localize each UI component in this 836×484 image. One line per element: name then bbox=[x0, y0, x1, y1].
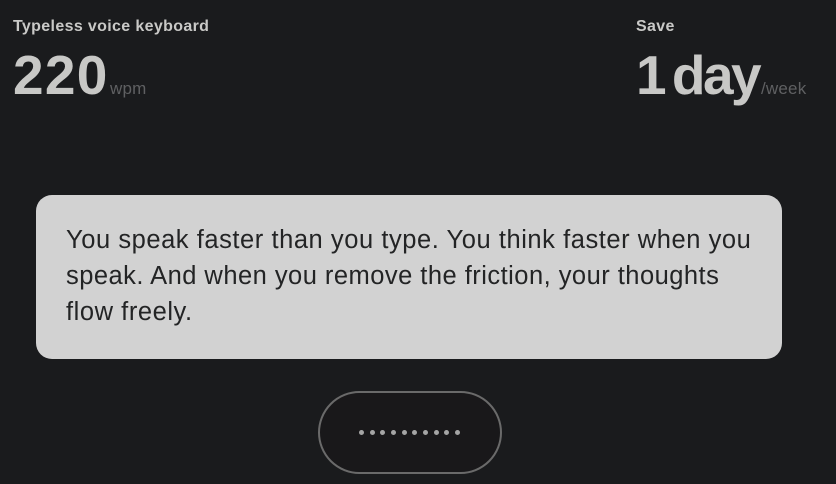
stat unit: /week: /week bbox=[761, 79, 806, 98]
transcript text: flow freely. bbox=[66, 298, 193, 326]
stat: words per minute bbox=[13, 18, 209, 106]
stat label: Typeless voice keyboard: Typeless voice keyboard bbox=[13, 18, 209, 35]
transcript text bbox=[66, 226, 751, 326]
icon: waveform dots bbox=[359, 430, 460, 435]
stat unit: wpm: wpm bbox=[110, 79, 146, 98]
transcript card bbox=[36, 195, 782, 359]
stat label: Save: Save bbox=[636, 18, 675, 35]
stat: time saved bbox=[636, 18, 806, 106]
voice input button bbox=[318, 391, 502, 474]
stat value: 220: 220 bbox=[13, 44, 109, 106]
transcript text: You speak faster than you type. You think faster when you bbox=[66, 226, 751, 254]
stat value: 1 day: 1 day bbox=[636, 44, 759, 106]
transcript text: speak. And when you remove the friction, your thoughts bbox=[66, 262, 719, 290]
